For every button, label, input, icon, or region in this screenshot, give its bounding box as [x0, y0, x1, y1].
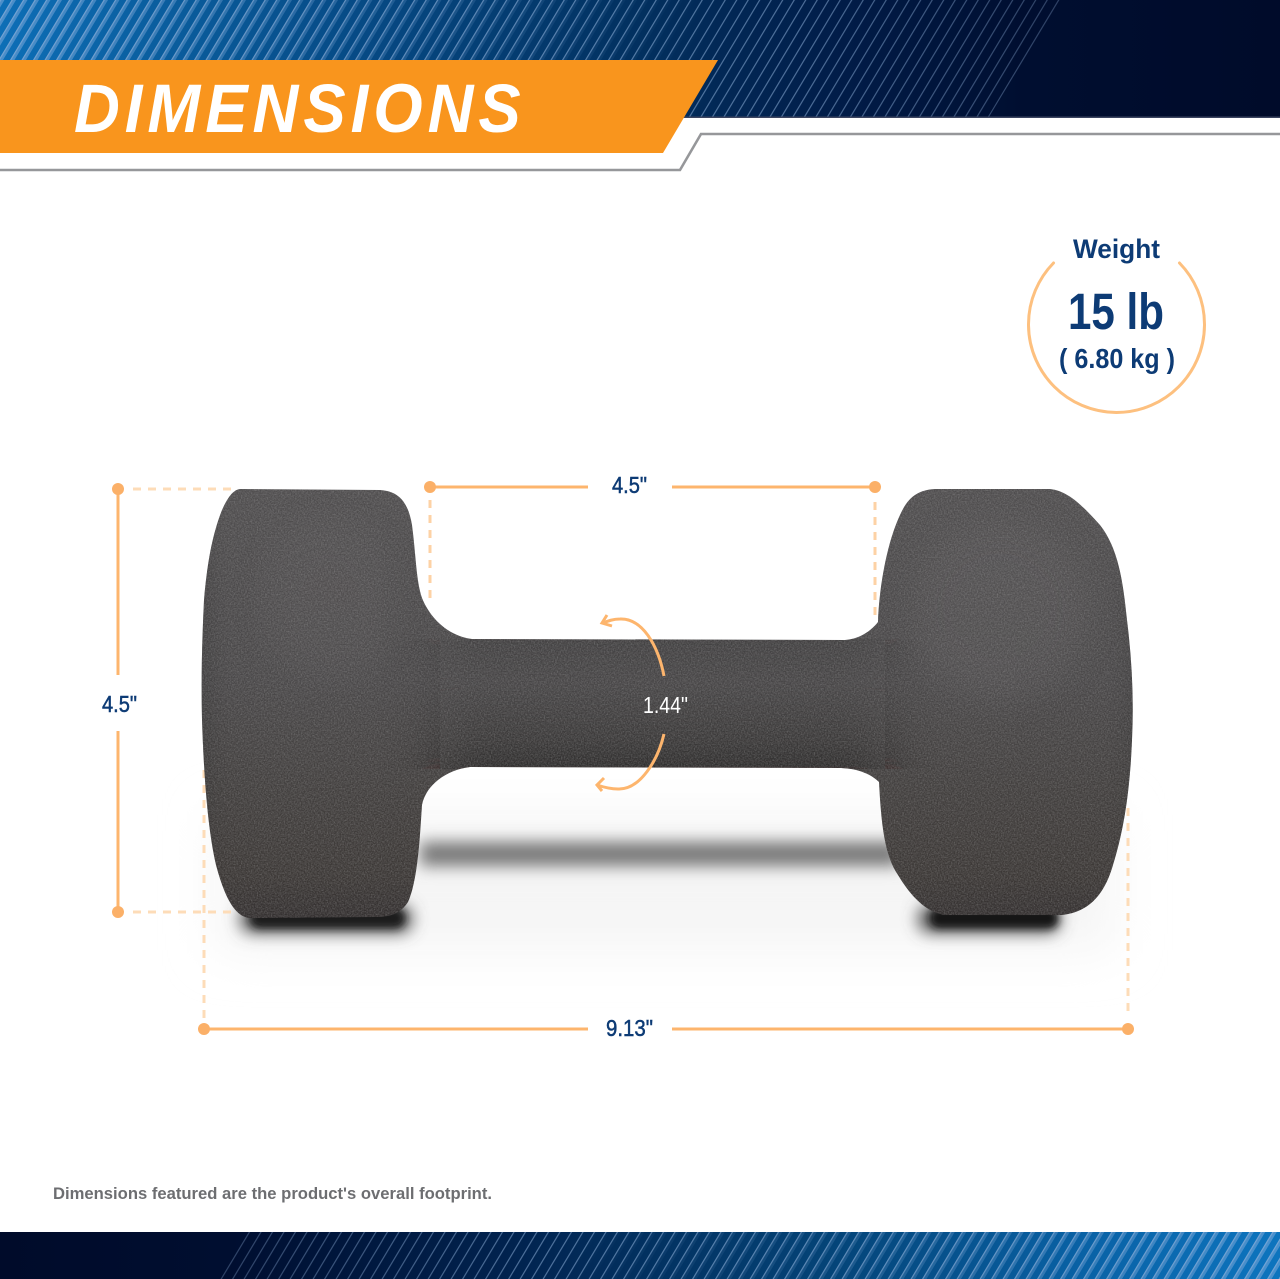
dimension: left height 4.5 in: 4.5" [102, 691, 137, 717]
dimension: overall length 9.13 in [198, 1015, 1134, 1041]
dimension: overall length 9.13 in: 9.13" [606, 1015, 653, 1041]
dimension: top handle length 4.5 in: 4.5" [612, 472, 647, 498]
arrow: lower curved [597, 734, 664, 791]
floor shadows [215, 815, 1115, 950]
dimension: top handle length 4.5 in [424, 472, 881, 498]
handle shading [440, 639, 885, 769]
handle measurement value: 1.44" [643, 692, 688, 718]
weight ring [1028, 263, 1204, 412]
dimension: handle circumference 1.44 in [597, 615, 688, 791]
bottom banner with diagonal stripes [0, 1232, 1280, 1279]
arrow: upper curved [602, 615, 664, 676]
weight value in kilograms: ( 6.80 kg ) [1059, 343, 1175, 374]
weight label: Weight [1073, 234, 1160, 264]
footnote: Dimensions featured are the product's overall footprint. [53, 1185, 492, 1203]
top banner with diagonal stripes [0, 0, 1280, 118]
title: DIMENSIONS [74, 71, 526, 148]
weight callout [1028, 234, 1204, 412]
title banner [0, 60, 718, 153]
weight value in pounds: 15 lb [1068, 283, 1164, 340]
dumbbell [202, 489, 1133, 918]
dashed guide lines [133, 489, 1128, 1020]
stepped grey rule [0, 134, 1280, 170]
dimension: left height 4.5 in [102, 483, 137, 918]
